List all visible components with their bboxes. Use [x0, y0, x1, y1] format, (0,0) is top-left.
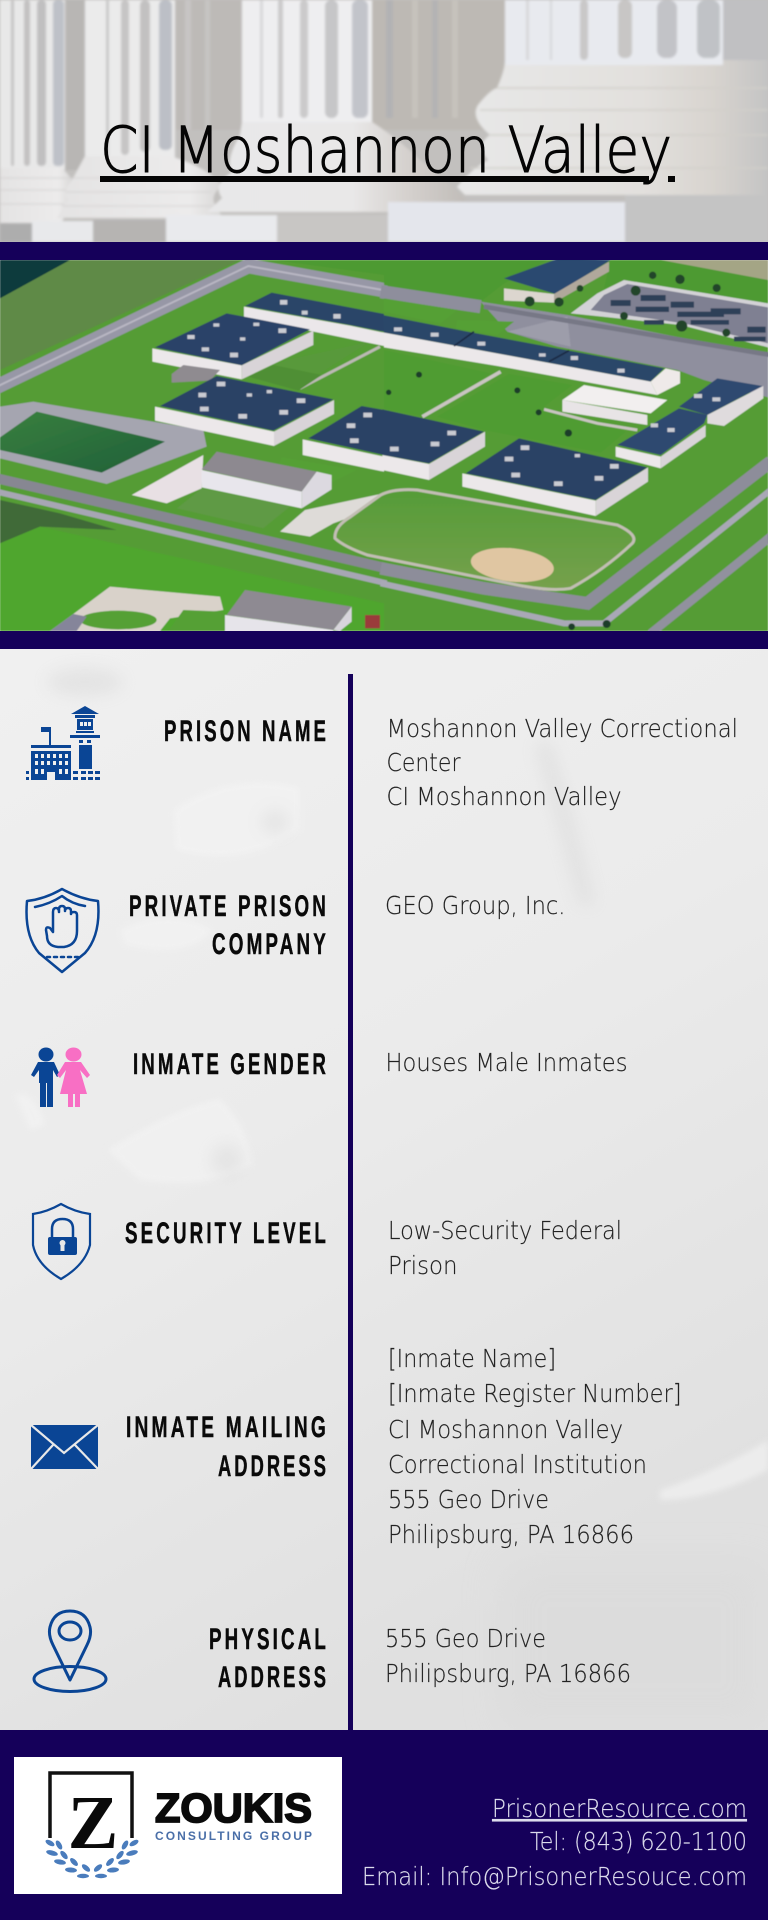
banner bottom band [0, 631, 768, 649]
gatehouse pad [50, 587, 223, 631]
label: physical address: PHYSICAL [209, 1623, 329, 1656]
icon: shield with raised hand [26, 889, 98, 972]
far left column [0, 0, 65, 170]
second column [85, 0, 175, 158]
title: CI Moshannon Valley [100, 114, 672, 187]
value: inmate mailing address: Correctional Institution [388, 1450, 647, 1479]
cell block C right part [382, 409, 484, 463]
row: inmate mailing address [31, 1344, 682, 1549]
ball field [335, 490, 634, 589]
label: inmate mailing address: ADDRESS [218, 1450, 329, 1483]
cell block B [160, 376, 333, 431]
label: private prison company: PRIVATE PRISON [129, 890, 329, 923]
value: physical address: Philipsburg, PA 16866 [385, 1659, 631, 1688]
value: inmate mailing address: [Inmate Name] [388, 1344, 556, 1373]
aerial photograph of the prison [0, 258, 768, 633]
label: physical address: ADDRESS [218, 1661, 329, 1694]
value: inmate mailing address: [Inmate Register Number] [388, 1379, 682, 1408]
label: inmate gender: INMATE GENDER [133, 1048, 329, 1081]
cell block D [466, 438, 647, 500]
value: prison name: Moshannon Valley Correctional [386, 714, 738, 743]
banner top band [0, 242, 768, 260]
value: private prison company: GEO Group, Inc. [385, 891, 566, 920]
row: private prison company [26, 889, 566, 972]
outer roads [381, 462, 768, 603]
value: prison name: Center [386, 748, 461, 777]
icon: envelope [31, 1425, 98, 1469]
logo: Zoukis Consulting Group: Z [68, 1781, 118, 1865]
long building right part [382, 315, 664, 382]
logo: Zoukis Consulting Group: CONSULTING GROUP [155, 1829, 312, 1843]
contact details: PrisonerResource.com [492, 1794, 747, 1823]
logo: Zoukis Consulting Group: ZOUKIS [155, 1785, 312, 1831]
label: inmate mailing address: INMATE MAILING [126, 1411, 329, 1444]
value: inmate mailing address: 555 Geo Drive [388, 1485, 549, 1514]
icon: shield with padlock [33, 1204, 90, 1279]
admin building [504, 258, 611, 294]
panel: footer [0, 1730, 768, 1920]
support block [562, 385, 667, 413]
logo: Zoukis Consulting Group [14, 1757, 342, 1894]
roof vents [187, 300, 372, 443]
courtyards [384, 350, 491, 417]
value: security level: Prison [388, 1251, 458, 1280]
centre divider [348, 674, 353, 1730]
label: inmate mailing address [126, 1411, 329, 1483]
right wing [679, 378, 762, 415]
cell block A [155, 313, 310, 365]
row: physical address [34, 1611, 631, 1694]
value: inmate mailing address: Philipsburg, PA 16866 [388, 1520, 634, 1549]
value: prison name: CI Moshannon Valley [386, 782, 622, 811]
value: security level [388, 1216, 622, 1280]
contact details: Tel: (843) 620-1100 [530, 1827, 747, 1856]
laurel wreath [44, 1838, 140, 1878]
label: physical address [209, 1623, 329, 1694]
third column [277, 215, 388, 242]
fourth column [625, 195, 768, 242]
icon: map location pin [34, 1611, 106, 1692]
panel: header with classical columns [0, 0, 768, 242]
label: private prison company [129, 890, 329, 961]
background shadow bands [66, 1, 84, 169]
contact details [362, 1794, 747, 1891]
icon: male and female figures [31, 1048, 90, 1107]
label: security level: SECURITY LEVEL [125, 1217, 329, 1250]
value: inmate mailing address [388, 1344, 682, 1549]
value: inmate gender: Houses Male Inmates [386, 1048, 628, 1077]
label: private prison company: COMPANY [212, 928, 329, 961]
parking lot [571, 280, 768, 347]
value: physical address [385, 1624, 631, 1688]
row: security level [33, 1204, 622, 1280]
row: inmate gender [31, 1048, 628, 1107]
grey roof hall [202, 452, 317, 492]
row: prison name [26, 706, 738, 811]
value: security level: Low-Security Federal [388, 1216, 622, 1245]
value: physical address: 555 Geo Drive [385, 1624, 546, 1653]
lower hall [227, 590, 352, 630]
value: inmate mailing address: CI Moshannon Valley [388, 1415, 623, 1444]
long building left part [245, 293, 384, 332]
panel: prison details [0, 649, 768, 1730]
label: prison name: PRISON NAME [164, 715, 329, 748]
cell block C left part [308, 406, 384, 455]
value: prison name [386, 714, 738, 811]
icon: prison with watchtower [26, 706, 100, 780]
